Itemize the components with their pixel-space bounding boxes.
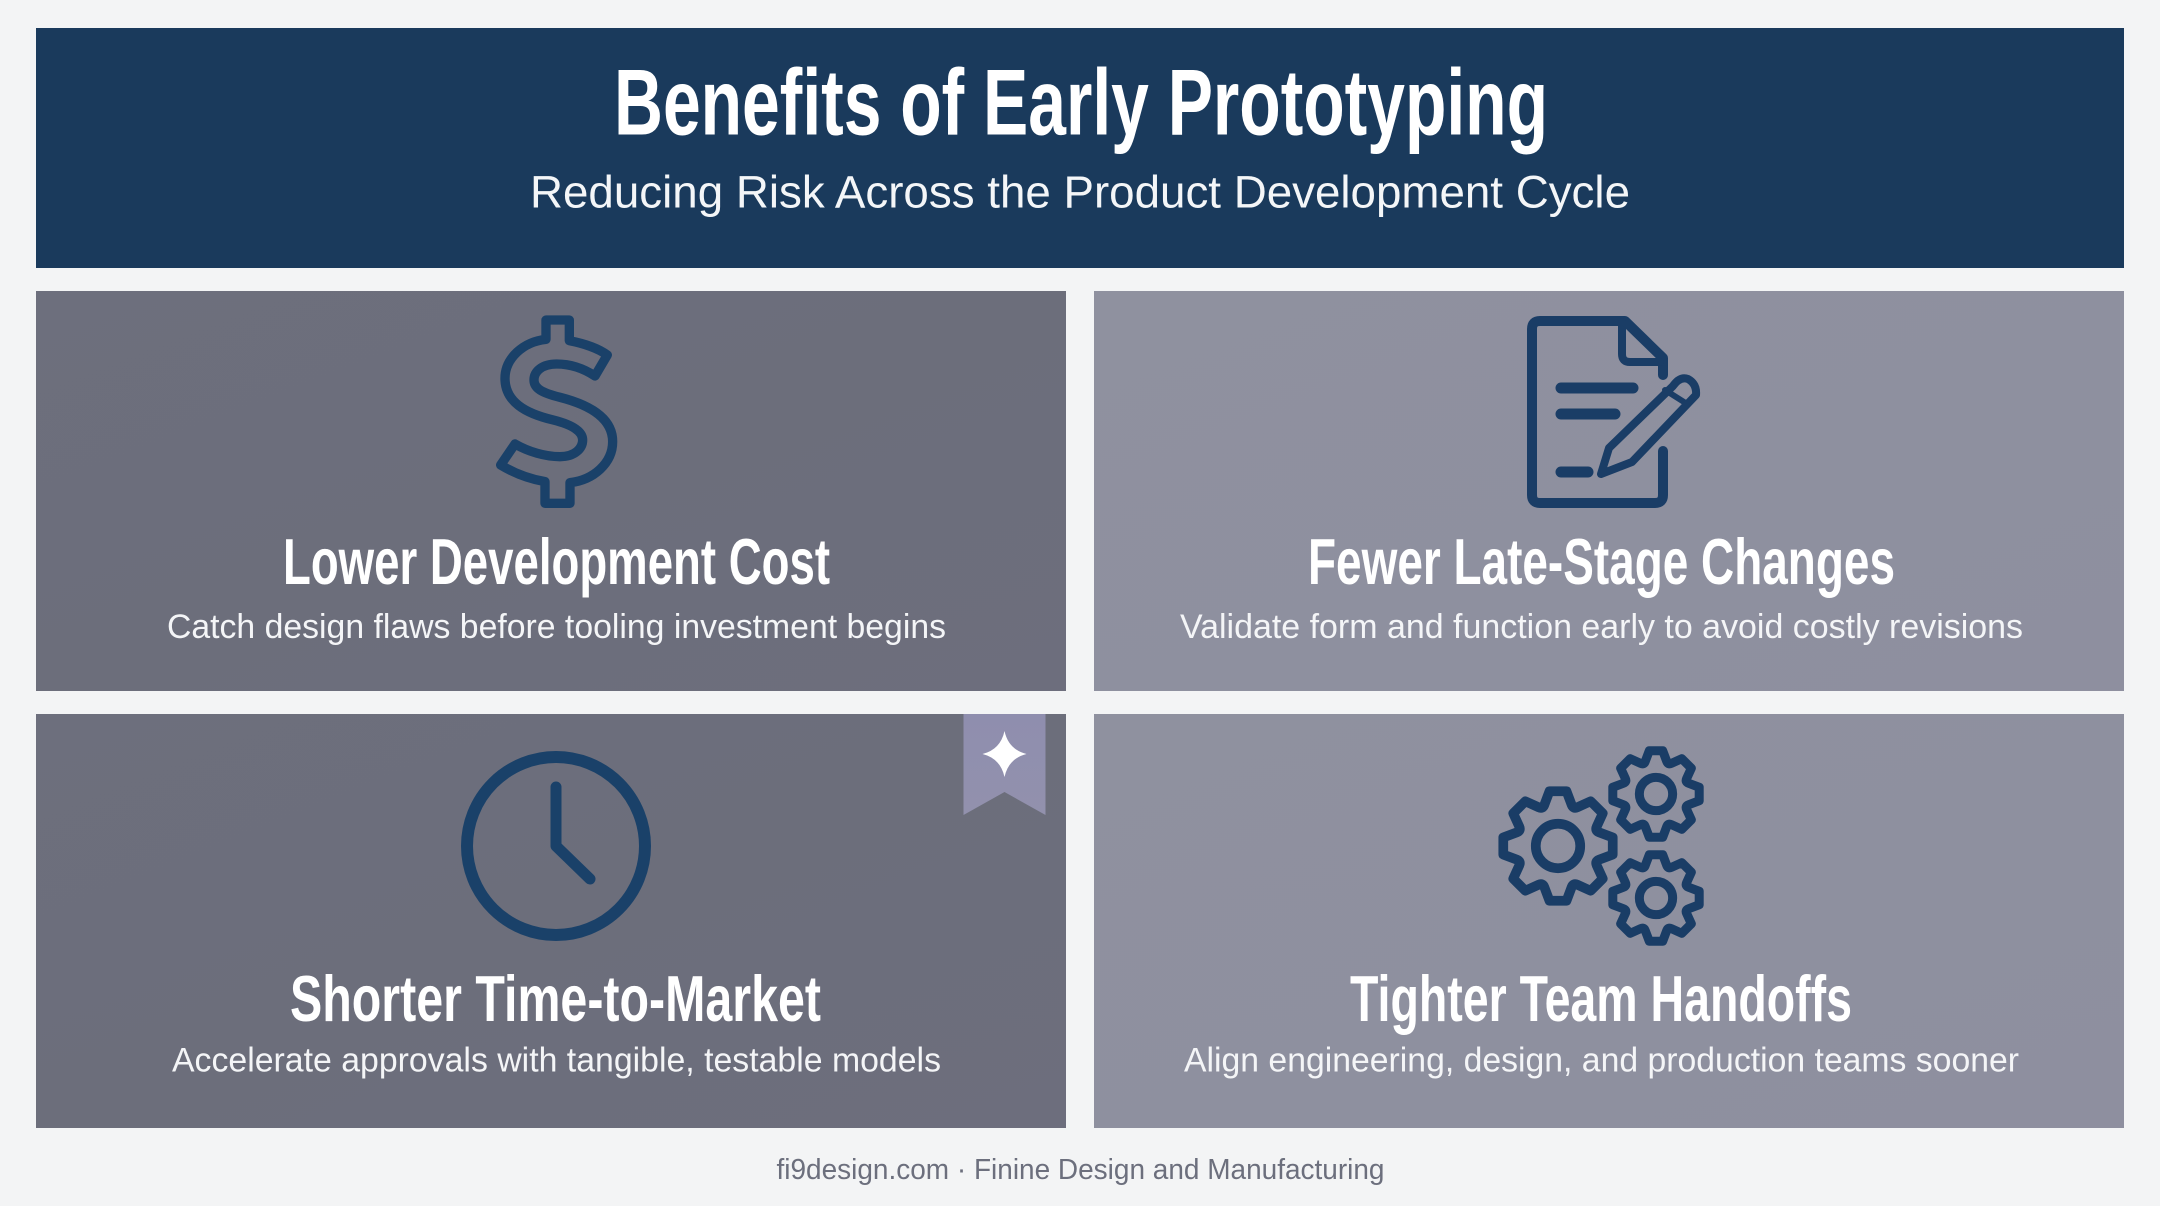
panel: fewer late-stage changes <box>1094 291 2124 691</box>
icon: dollar sign <box>501 320 613 503</box>
icon: three gears <box>1503 751 1699 941</box>
description: Validate form and function early to avoid costly revisions <box>1180 608 2023 646</box>
title: Benefits of Early Prototyping <box>614 50 1548 154</box>
icon: document with pencil <box>1532 321 1696 503</box>
panel: tighter team handoffs <box>1094 714 2124 1128</box>
ribbon badge with sparkle <box>964 714 1046 815</box>
icon: clock <box>467 757 645 935</box>
description: Catch design flaws before tooling investment begins <box>167 608 946 646</box>
header banner <box>36 28 2124 268</box>
panel: shorter time-to-market <box>36 714 1066 1128</box>
heading: Shorter Time-to-Market <box>290 962 821 1035</box>
footer text: fi9design.com · Finine Design and Manufacturing <box>776 1154 1384 1186</box>
heading: Lower Development Cost <box>283 525 830 598</box>
panel: lower development cost <box>36 291 1066 691</box>
heading: Tighter Team Handoffs <box>1350 962 1852 1035</box>
heading: Fewer Late-Stage Changes <box>1308 525 1895 598</box>
icon: sparkle <box>982 731 1026 777</box>
description: Accelerate approvals with tangible, testable models <box>172 1042 941 1080</box>
subtitle: Reducing Risk Across the Product Development Cycle <box>530 166 1630 218</box>
description: Align engineering, design, and production teams sooner <box>1184 1042 2019 1080</box>
